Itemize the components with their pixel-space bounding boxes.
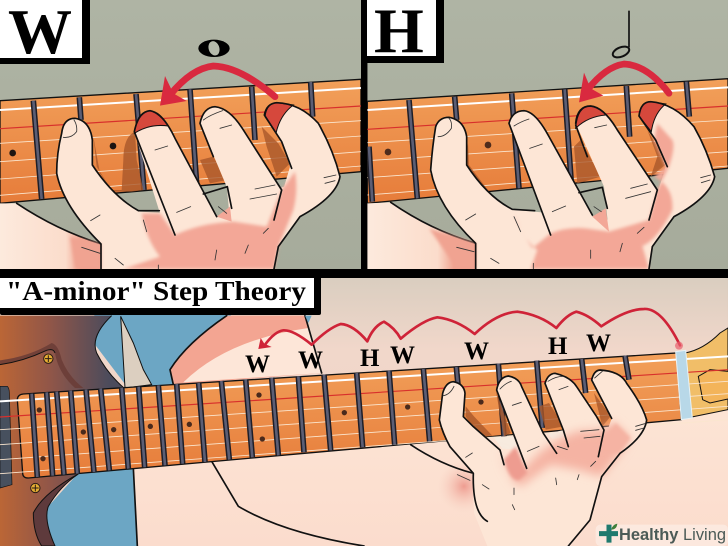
background wall	[0, 278, 728, 505]
pickup	[0, 386, 12, 488]
step labels: H	[360, 345, 380, 372]
panel: whole step	[0, 0, 361, 269]
hand	[429, 102, 715, 269]
arrow: step path	[258, 309, 683, 350]
title: "A-minor" Step Theory	[6, 276, 307, 306]
icon: screw	[31, 483, 40, 493]
icon: screw	[44, 354, 53, 363]
forearm	[0, 203, 101, 269]
icon: whole note	[198, 40, 230, 57]
step labels: W	[298, 347, 323, 374]
fretboard	[0, 350, 728, 478]
forearm	[367, 202, 476, 269]
step labels: W	[464, 338, 489, 365]
panel: A-minor step theory	[0, 273, 728, 546]
arrow: half step	[579, 64, 669, 102]
fretboard	[367, 79, 728, 203]
lower body	[133, 400, 728, 546]
arrow: whole step	[160, 66, 275, 106]
step labels: H	[548, 333, 568, 360]
step labels: W	[390, 342, 415, 369]
headstock	[685, 328, 728, 417]
title	[0, 270, 321, 315]
guitar body	[0, 316, 124, 546]
finger shadows	[464, 130, 667, 193]
torso outline	[133, 461, 364, 546]
brand watermark	[596, 524, 728, 546]
finger shadows	[93, 127, 290, 192]
step labels	[245, 334, 611, 372]
hand	[57, 103, 340, 269]
shoulder	[170, 316, 322, 385]
fretboard	[0, 79, 361, 203]
icon: half note	[611, 11, 631, 60]
hand	[439, 370, 647, 546]
torso sliver	[121, 316, 152, 388]
step labels: W	[586, 330, 611, 357]
wrist blush	[445, 467, 474, 505]
shirt	[47, 315, 232, 546]
forearm edge	[411, 445, 472, 473]
watermark text: Healthy Living	[619, 525, 726, 544]
nut	[676, 350, 692, 420]
step labels: W	[245, 351, 270, 378]
finger shadows	[466, 390, 611, 436]
panel: half step	[367, 0, 728, 269]
label: H	[361, 0, 444, 66]
